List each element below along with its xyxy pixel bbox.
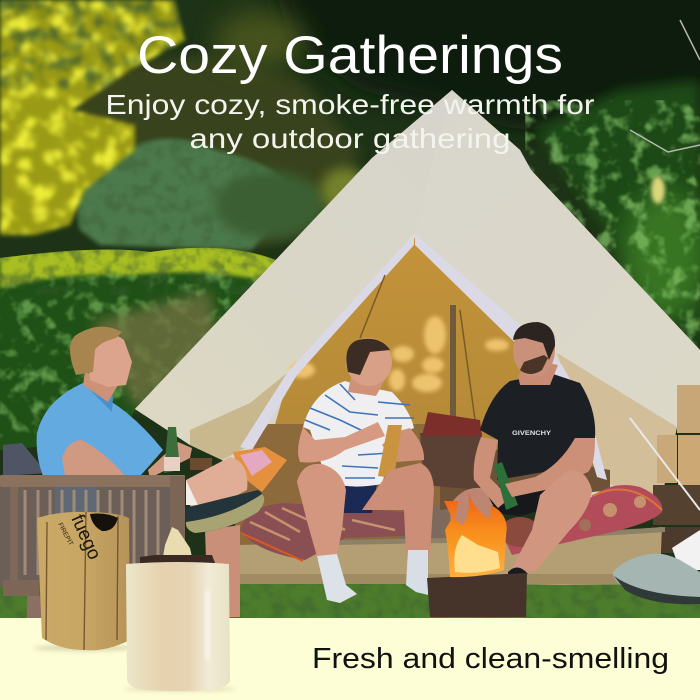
subheading line 1: Enjoy cozy, smoke-free warmth for [106,89,594,120]
man 2 shirt stripes [305,384,414,478]
man 3 far leg behind fire [450,488,496,570]
firepit wood shavings [163,527,192,557]
flecks of sun above the tent [321,168,369,212]
man 2 right arm [382,428,424,462]
back cushions [420,433,482,490]
tent door flaps [240,234,414,450]
right visitor foot [613,530,700,604]
grass [0,578,700,618]
tent canvas base [135,90,700,510]
man 1 side table [190,458,212,470]
firepit body [126,562,230,691]
man 1 lower leg [205,525,240,617]
man 1 neck and head [83,372,118,402]
man 2 neck and head [348,372,386,396]
man 1 thigh [186,457,247,512]
man 3 shirt [480,373,595,480]
fire flames [444,490,507,577]
wooden platform [238,527,665,585]
man 2 right leg [362,463,434,555]
soft green tree in distance [78,139,290,250]
man 3 left arm [474,437,510,508]
man 2 left sock and foot [317,554,357,603]
hedge [0,245,285,450]
man 3 sandal [508,567,528,575]
branch highlights [630,20,700,152]
headline: Cozy Gatherings [137,26,563,85]
tent floor behind people [235,424,440,545]
sun dapples on tent wall [289,316,509,392]
kraft label flame logo [90,514,118,531]
tent centre pole [450,305,456,425]
man 1 arm [62,440,125,476]
man 2 left arm [298,422,385,462]
man 3 shirt logo: GIVENCHY [512,430,552,437]
man 2 right sock [406,550,428,595]
man 3 bottle [494,462,518,510]
guy rope [630,418,700,510]
product shadows [33,645,236,691]
man 3 shorts [485,470,565,516]
tent canvas right panel [395,90,700,427]
bell tent [135,90,700,545]
cardboard boxes [657,385,700,485]
left cushion [240,503,405,560]
alabaster candle firepit [126,527,230,691]
orange cushion [233,447,287,492]
bright right foliage [535,80,700,345]
man 3 neck and head [518,360,558,385]
man 3 right arm [505,438,595,497]
tent lower right wall [557,353,677,505]
man 3 near leg [512,470,592,572]
right cushion [500,485,662,555]
man 2 glass bottle [378,425,402,478]
kraft label brand text: fuego [66,511,105,563]
kraft paper wrapped firepit [37,511,130,650]
man 1 white shorts [186,480,198,505]
man 2 left leg [297,464,346,560]
tent doorway interior [262,238,610,490]
man 2 shirt [303,381,414,487]
dry bamboo in hedge [92,290,218,410]
yellow sunlit tree [0,0,188,238]
log stump fire pit [427,573,527,617]
subheading line 2: any outdoor gathering [190,123,510,154]
man 2 in striped shirt [297,338,434,603]
man 1 shirt [37,383,163,476]
tent lower left skirt [190,373,287,460]
dark olive canopy [70,55,360,250]
caption: Fresh and clean-smelling [312,643,669,675]
man 1 shoe [184,490,263,533]
man 1 grey seat cushion [3,443,47,476]
wooden bench chair [0,475,185,618]
kraft label firepit text: FIREPIT [56,522,74,547]
patterned cushions [233,447,662,561]
firepit dark lid [140,555,215,564]
cream caption band [0,618,700,700]
tree stumps at right [653,485,700,553]
man 1 bottle [164,427,180,473]
man 1 in blue polo [3,327,264,617]
dark upper canopy [270,0,700,130]
man 2 shorts [335,478,378,513]
tent canvas left panel [135,90,452,445]
man 3 in black t-shirt [450,322,595,575]
